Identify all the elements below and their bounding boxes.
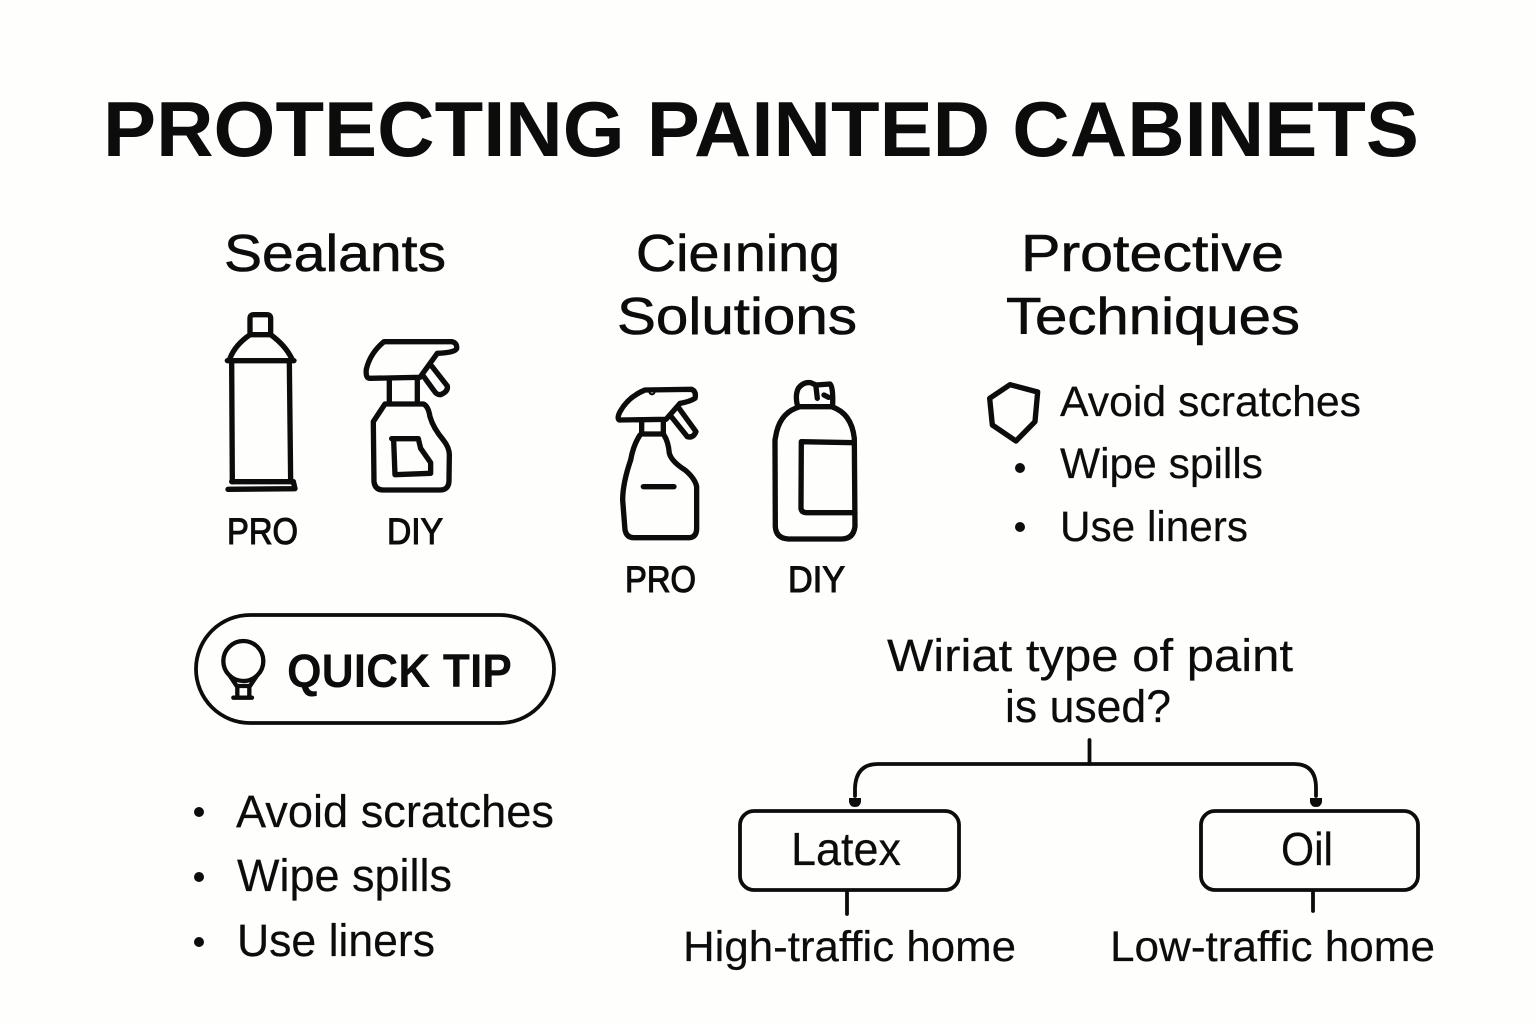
panel: protective techniques — [990, 225, 1361, 551]
connector: latex to high-traffic — [845, 892, 849, 914]
list: quick tip items: Avoid scratches — [236, 786, 554, 837]
list: protective techniques — [1015, 378, 1361, 551]
list: quick tip items: Use liners — [237, 915, 435, 966]
list: protective techniques: Use liners — [1060, 503, 1248, 551]
title: PROTECTING PAINTED CABINETS — [103, 85, 1419, 173]
icon: light bulb — [223, 641, 263, 698]
icon: spray bottle (diy) — [366, 342, 457, 490]
panel: cleaning solutions — [617, 225, 857, 600]
box: latex — [740, 811, 959, 890]
heading: protective techniques — [1006, 225, 1300, 346]
icon: spray bottle (pro) — [618, 389, 697, 538]
heading: protective techniques: Protective — [1021, 225, 1284, 283]
label: sealants diy: DIY — [387, 511, 443, 552]
list: quick tip items: Wipe spills — [237, 850, 452, 901]
label: high-traffic home: High-traffic home — [683, 923, 1016, 971]
question text — [887, 630, 1294, 732]
connector: oil to low-traffic — [1311, 892, 1315, 911]
list: protective techniques: Avoid scratches — [1060, 378, 1361, 426]
question text: is used? — [1005, 681, 1171, 732]
heading: cleaning solutions: Solutions — [617, 288, 857, 346]
panel: sealants — [224, 225, 457, 552]
icon: shield — [990, 385, 1038, 441]
list: protective techniques: Wipe spills — [1060, 440, 1263, 488]
box: oil — [1201, 811, 1418, 890]
box: latex: Latex — [791, 823, 901, 875]
label: low-traffic home: Low-traffic home — [1110, 923, 1435, 971]
panel: paint type decision tree — [683, 630, 1435, 971]
question text: Wiriat type of paint — [887, 630, 1294, 681]
box: oil: Oil — [1281, 823, 1333, 875]
icon: aerosol can (pro) — [227, 315, 295, 489]
label: sealants pro: PRO — [227, 511, 298, 552]
quick tip pill — [196, 615, 554, 723]
heading: protective techniques: Techniques — [1006, 288, 1300, 346]
heading: sealants: Sealants — [224, 225, 446, 283]
label: cleaning diy: DIY — [788, 559, 845, 600]
icon: bottle (diy) — [775, 383, 855, 539]
quick tip label: QUICK TIP — [287, 644, 512, 697]
heading: cleaning solutions: Cieıning — [636, 225, 840, 283]
arrow: branching connector — [849, 740, 1322, 807]
label: cleaning pro: PRO — [625, 559, 696, 600]
panel: quick tip — [196, 615, 554, 723]
heading: cleaning solutions — [617, 225, 857, 346]
list: quick tip items — [194, 786, 554, 966]
